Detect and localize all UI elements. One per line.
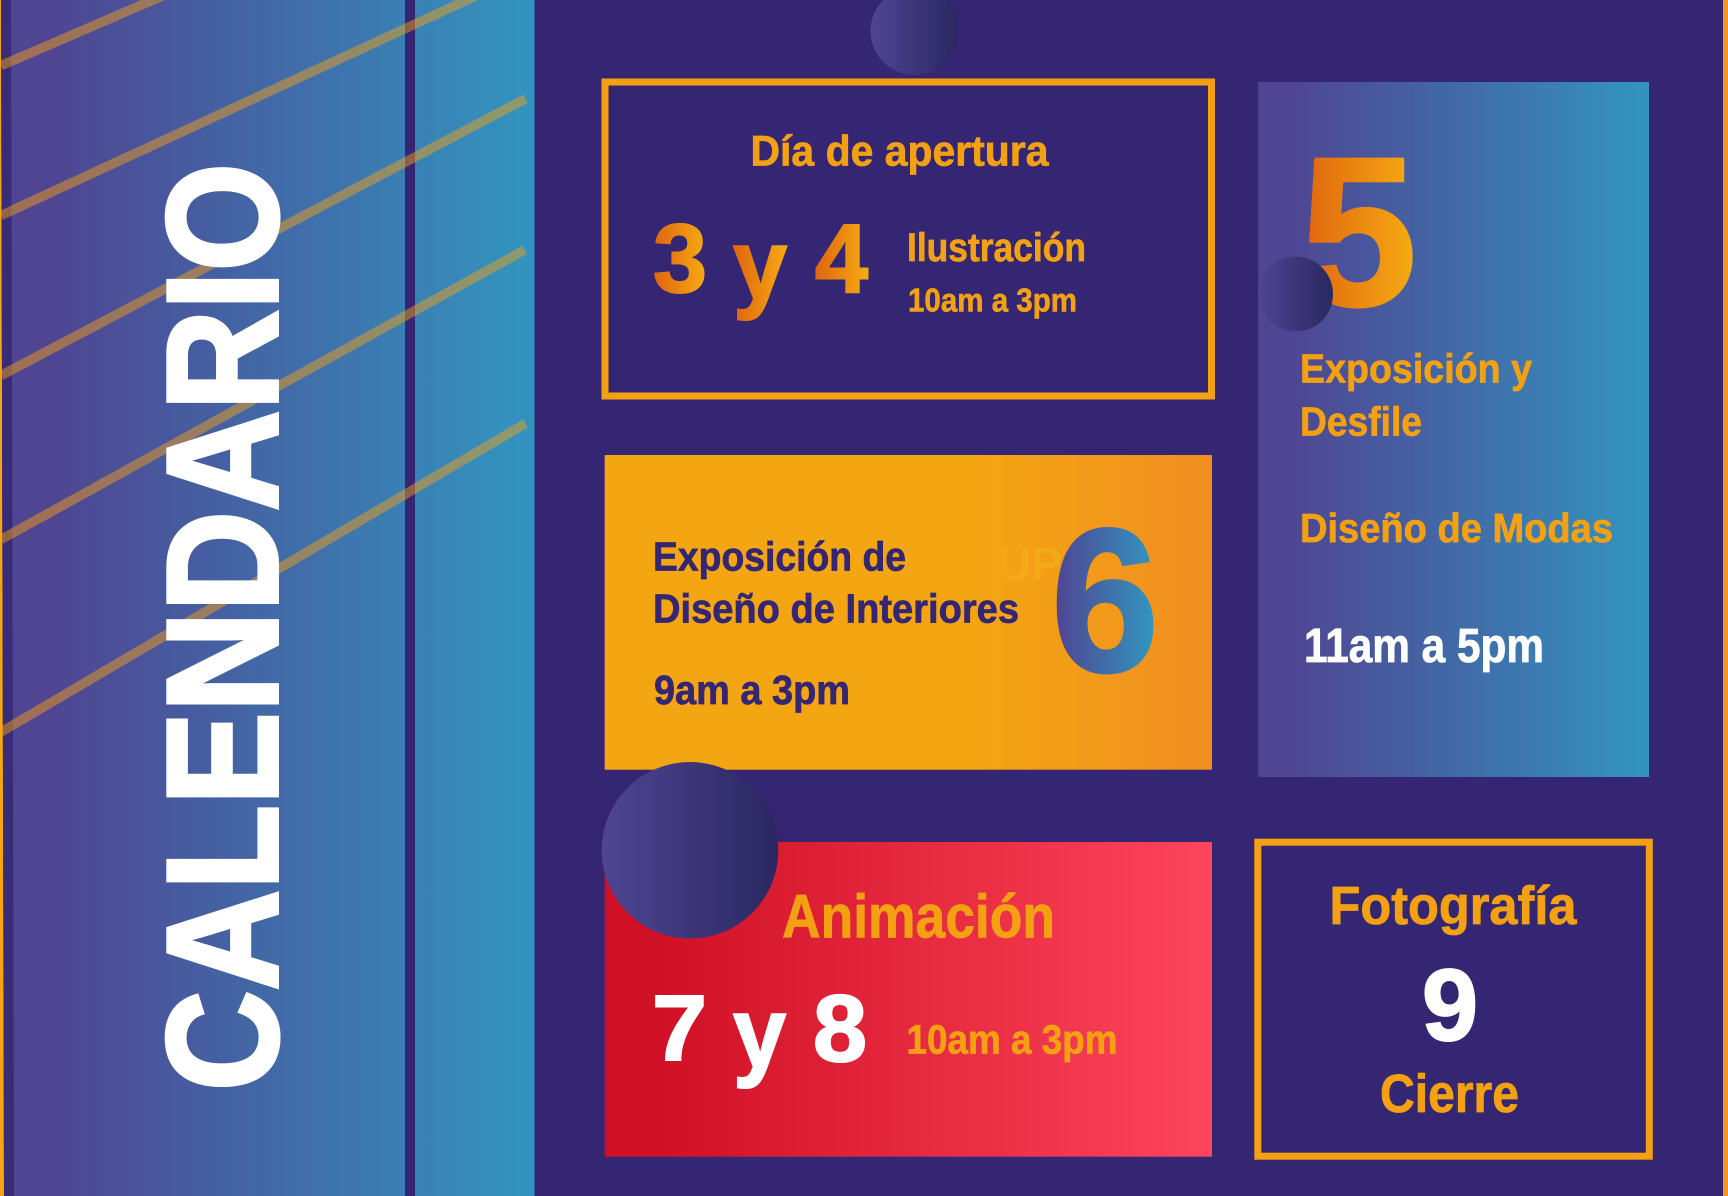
hours: 11am a 5pm — [1304, 620, 1544, 673]
panel: opening day — [605, 82, 1212, 396]
hours: 10am a 3pm — [908, 282, 1077, 319]
dates: 3 y 4: 4 — [815, 204, 868, 313]
panel background — [1258, 82, 1649, 777]
dates: 7 y 8 — [652, 976, 867, 1089]
heading: Exposición de — [653, 533, 906, 579]
heading: Exposición y — [1300, 346, 1532, 392]
icon: top circle — [870, 0, 958, 75]
date: 9: 9 — [1422, 950, 1478, 1062]
hours: 9am a 3pm — [654, 667, 850, 713]
title: CALENDARIO — [135, 163, 311, 1091]
label: Cierre — [1380, 1064, 1519, 1124]
heading second line: Desfile — [1300, 399, 1422, 445]
dates: 3 y 4: 3 — [653, 204, 707, 313]
panel frame — [1258, 842, 1649, 1156]
dates: 7 y 8: 7 — [652, 976, 707, 1080]
heading second line: Diseño de Interiores — [653, 586, 1019, 632]
panel background — [605, 455, 1212, 770]
panel: closing day — [1258, 842, 1649, 1156]
dark edge strip — [1, 0, 14, 1196]
panel background — [605, 842, 1212, 1157]
big number 6: 6 — [1051, 487, 1159, 715]
heading: Animación — [782, 883, 1055, 951]
dates: 3 y 4 — [653, 204, 868, 321]
panel: left title band — [0, 0, 534, 1196]
discipline: Ilustración — [907, 226, 1086, 270]
panel frame — [605, 82, 1212, 396]
hours: 10am a 3pm — [906, 1016, 1118, 1062]
left orange edge — [0, 0, 4, 1196]
icon: large circle — [602, 762, 778, 939]
dark vertical stripe — [405, 0, 415, 1196]
panel: day 6 — [605, 455, 1212, 770]
discipline: Diseño de Modas — [1300, 505, 1613, 551]
gradient band — [11, 0, 534, 1196]
panel: days 7 and 8 — [602, 762, 1212, 1157]
panel: day 5 — [1258, 82, 1649, 777]
dates: 7 y 8: 8 — [813, 976, 867, 1082]
dates: 3 y 4: y — [733, 209, 787, 321]
icon: circle — [1258, 256, 1333, 332]
heading: Día de apertura — [750, 128, 1050, 176]
big number 5: 5 — [1300, 113, 1417, 350]
right orange edge — [1723, 0, 1728, 1196]
dates: 7 y 8: y — [733, 977, 786, 1089]
faint watermark: UP — [998, 538, 1062, 590]
heading: Fotografía — [1330, 876, 1577, 936]
diagonal lines — [1, 0, 526, 732]
